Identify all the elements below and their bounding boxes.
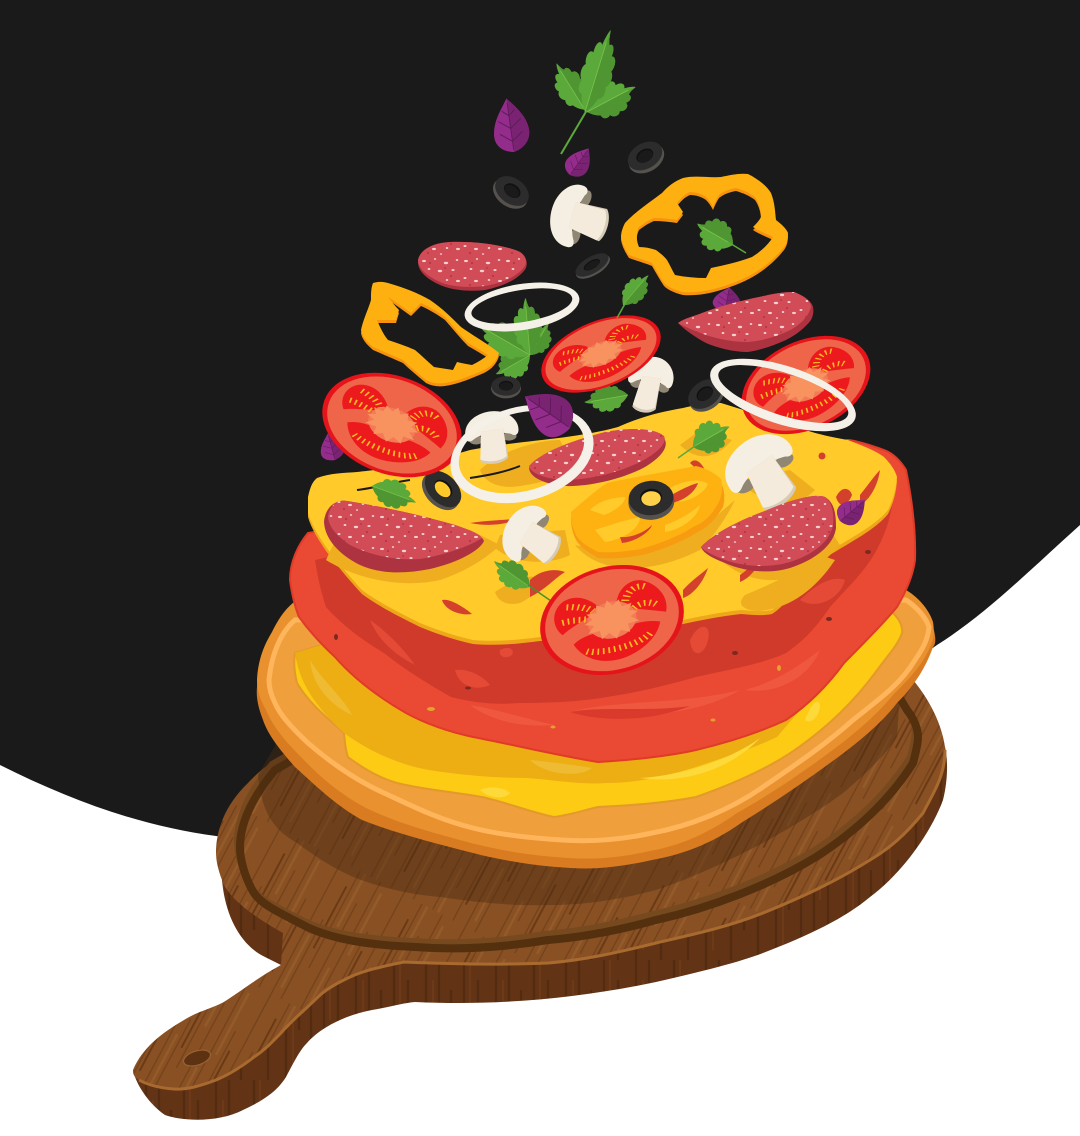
lower cheese layer	[294, 560, 902, 817]
pizza shadow on board	[258, 690, 900, 905]
parsley behind upper ring	[470, 297, 559, 387]
onion ring upper	[461, 275, 583, 339]
onion ring right	[702, 344, 864, 446]
basil behind right salami	[711, 285, 743, 314]
parsley left on cheese	[367, 473, 421, 515]
pepper slice on cheese	[571, 466, 724, 558]
parsley on cheese right	[678, 412, 737, 461]
parsley centre small	[582, 382, 630, 416]
mushroom inside ring	[464, 410, 520, 465]
tomato left	[308, 354, 476, 496]
background: dark curved panel	[0, 0, 1080, 843]
wooden board	[133, 680, 947, 1120]
yellow pepper right	[621, 174, 788, 295]
onion ring lower	[439, 390, 605, 518]
board rim highlight	[139, 750, 945, 1089]
tomato right	[726, 316, 886, 454]
salami right on cheese	[701, 496, 836, 571]
tray groove	[240, 690, 918, 948]
mushroom centre falling	[620, 351, 678, 418]
basil on cheese edge	[832, 491, 873, 531]
pizza crust	[257, 590, 935, 869]
olive behind right ring	[682, 373, 730, 418]
olive centre on pepper	[627, 479, 676, 522]
yellow pepper left	[361, 282, 499, 386]
mushroom right on cheese	[713, 423, 814, 523]
cheese shadows under toppings	[326, 430, 840, 611]
salami right falling	[678, 292, 813, 352]
basil top large	[489, 96, 532, 154]
handle hole	[182, 1047, 212, 1069]
parsley in pepper	[689, 210, 746, 259]
tomato on pizza	[528, 549, 696, 691]
tomato sauce layer	[290, 440, 915, 762]
basil top small	[561, 142, 598, 182]
parsley slim	[614, 268, 657, 318]
salami centre	[529, 429, 666, 486]
salami left on cheese	[324, 501, 484, 572]
tomato centre	[530, 300, 672, 408]
olive flat	[571, 248, 614, 284]
parsley lower on cheese	[486, 551, 551, 601]
olive top right	[622, 135, 670, 179]
olive top left	[487, 170, 535, 215]
olive left on cheese	[415, 463, 469, 517]
small olive	[491, 376, 521, 398]
dark slits in cheese	[357, 466, 520, 490]
board top surface	[133, 680, 945, 1089]
mushroom centre on cheese	[491, 496, 573, 579]
basil behind left tomato	[316, 430, 347, 463]
falling toppings	[308, 25, 886, 518]
board side	[133, 747, 947, 1120]
parsley sprig top	[544, 25, 643, 154]
salami top	[418, 242, 527, 291]
mushroom top	[541, 178, 618, 258]
top cheese layer	[308, 403, 897, 691]
tray inner lip	[237, 684, 915, 942]
cheese holes showing sauce	[410, 452, 880, 614]
basil large	[513, 379, 582, 445]
